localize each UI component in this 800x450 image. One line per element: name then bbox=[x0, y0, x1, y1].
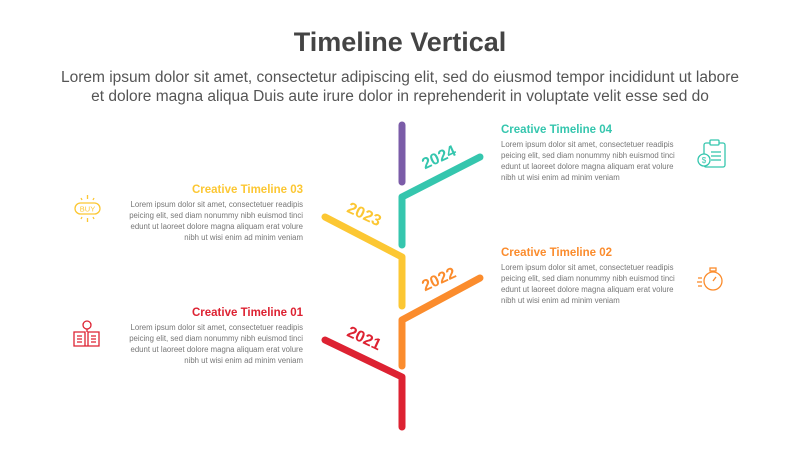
text block: timeline 01: Creative Timeline 01 bbox=[192, 307, 303, 319]
text block: timeline 04: Lorem ipsum dolor sit amet, consectetuer readipis peicing elit, sed diam nonummy nibh euismod tinci edunt ut laoreet dolore magna aliquam erat volure nibh ut wisi enim ad minim veniam bbox=[501, 140, 675, 182]
text block: timeline 01: Lorem ipsum dolor sit amet, consectetuer readipis peicing elit, sed diam nonummy nibh euismod tinci edunt ut laoreet dolore magna aliquam erat volure nibh ut wisi enim ad minim veniam bbox=[129, 323, 303, 365]
year labels: 2024 bbox=[419, 143, 459, 173]
icon: buy bbox=[75, 195, 100, 222]
year labels: 2021 bbox=[344, 324, 384, 354]
subtitle: et dolore magna aliqua Duis aute irure dolor in reprehenderit in voluptate velit esse sed do bbox=[91, 88, 709, 105]
segment 2022 orange bbox=[402, 278, 480, 366]
segment 2023 yellow bbox=[325, 217, 402, 306]
icon: stopwatch bbox=[697, 268, 722, 290]
icon: invoice: $ bbox=[702, 156, 707, 165]
year labels bbox=[344, 143, 459, 354]
subtitle bbox=[61, 69, 739, 105]
segment 2021 red bbox=[325, 340, 402, 427]
year labels: 2022 bbox=[419, 265, 459, 295]
text block: timeline 03: Lorem ipsum dolor sit amet, consectetuer readipis peicing elit, sed diam nonummy nibh euismod tinci edunt ut laoreet dolore magna aliquam erat volure nibh ut wisi enim ad minim veniam bbox=[129, 200, 303, 242]
icon: book bbox=[74, 321, 99, 346]
text block: timeline 04: Creative Timeline 04 bbox=[501, 124, 612, 136]
icon: invoice bbox=[698, 140, 725, 167]
text block: timeline 03: Creative Timeline 03 bbox=[192, 184, 303, 196]
title: Timeline Vertical bbox=[294, 27, 506, 57]
segment 2024 teal bbox=[402, 157, 480, 245]
icon: buy: BUY bbox=[80, 204, 95, 214]
text block: timeline 02: Lorem ipsum dolor sit amet, consectetuer readipis peicing elit, sed diam nonummy nibh euismod tinci edunt ut laoreet dolore magna aliquam erat volure nibh ut wisi enim ad minim veniam bbox=[501, 263, 675, 305]
year labels: 2023 bbox=[344, 200, 384, 230]
subtitle: Lorem ipsum dolor sit amet, consectetur adipiscing elit, sed do eiusmod tempor incididunt ut labore bbox=[61, 69, 739, 86]
segment 2024 purple bbox=[398, 125, 406, 182]
text block: timeline 02: Creative Timeline 02 bbox=[501, 247, 612, 259]
